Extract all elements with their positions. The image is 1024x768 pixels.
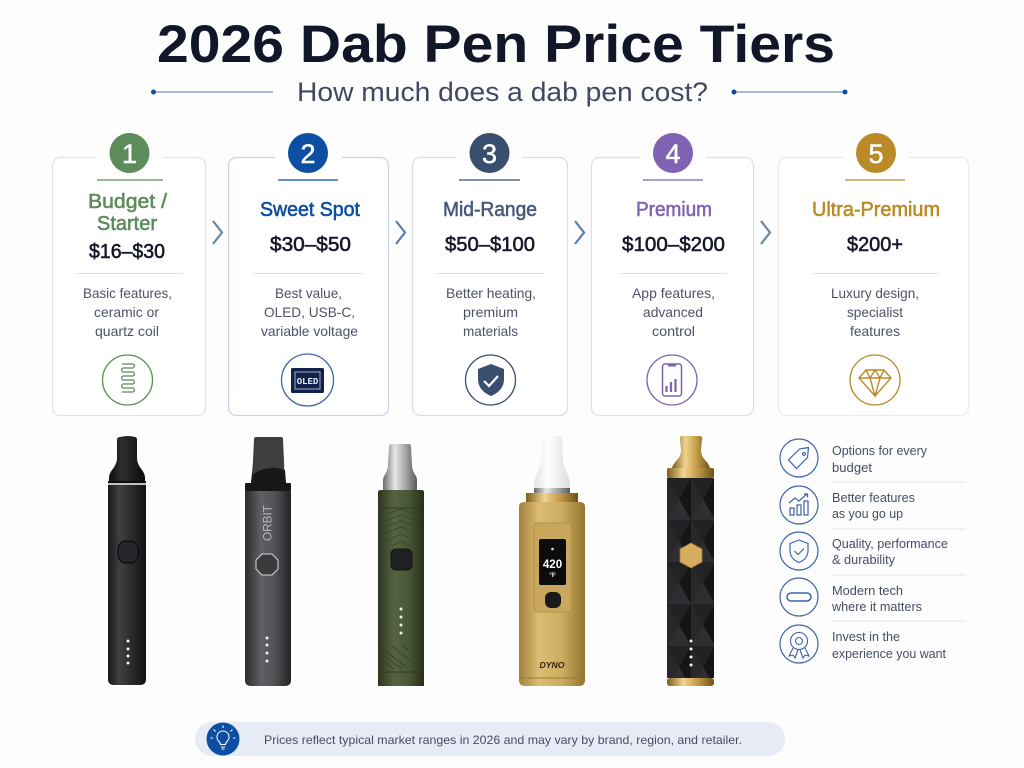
panel: tier 3 mid-range	[412, 133, 568, 416]
benefit: modern tech: where it matters	[831, 600, 922, 614]
description: OLED, USB-C,	[264, 304, 355, 320]
power button	[118, 541, 138, 563]
price: $200+	[847, 234, 903, 256]
number badge 3	[470, 133, 510, 173]
icon: light bulb	[206, 722, 240, 756]
icon: coil	[102, 355, 152, 405]
icon: OLED display: OLED	[297, 377, 319, 387]
icon: phone with bars	[647, 355, 697, 405]
footer note: Prices reflect typical market ranges in 2026 and may vary by brand, region, and retailer.	[264, 733, 742, 747]
tier name: Mid-Range	[443, 199, 537, 221]
panel: tier 4 premium	[592, 133, 754, 416]
number badge 4	[653, 133, 693, 173]
benefit: invest: Invest in the	[832, 630, 900, 644]
tier name: Starter	[97, 213, 157, 235]
number badge 2	[288, 133, 328, 173]
description	[632, 285, 715, 339]
arrow 3 to 4	[575, 221, 584, 244]
price: $30–$50	[270, 234, 351, 256]
number badge 3: 3	[482, 139, 497, 169]
title: 2026 Dab Pen Price Tiers	[157, 15, 835, 74]
pen 5: black and gold	[667, 436, 714, 686]
button	[545, 592, 561, 608]
temperature screen	[539, 539, 566, 585]
pen 1: matte black	[108, 436, 146, 685]
benefit: better features	[780, 486, 915, 524]
footer note	[195, 722, 785, 756]
description: specialist	[847, 304, 903, 320]
hexagon button	[680, 543, 702, 568]
octagon button	[256, 554, 278, 575]
description: advanced	[643, 304, 703, 320]
description: premium	[463, 304, 518, 320]
benefit: invest	[780, 625, 947, 663]
number badge 5	[856, 133, 896, 173]
arrow 2 to 3	[396, 221, 405, 244]
number badge 4: 4	[665, 139, 681, 169]
description: Best value,	[275, 285, 342, 301]
pen 4: gold dyno	[519, 436, 585, 686]
description: ceramic or	[94, 304, 159, 320]
benefit: options for every budget: Options for every	[832, 444, 928, 458]
button	[391, 549, 412, 570]
benefit: better features: Better features	[832, 491, 915, 505]
benefit: quality: Quality, performance	[832, 537, 948, 551]
brand label: DYNO	[540, 661, 565, 670]
description: quartz coil	[95, 323, 159, 339]
arrow 4 to 5	[761, 221, 770, 244]
number badge 1: 1	[122, 139, 137, 169]
benefit: better features: as you go up	[832, 507, 903, 521]
description: Luxury design,	[831, 285, 919, 301]
benefit: quality: & durability	[832, 553, 896, 567]
description: materials	[463, 323, 518, 339]
icon: diamond	[850, 355, 900, 405]
benefit: options for every budget	[780, 439, 928, 477]
icon: shield check	[466, 355, 516, 405]
description: variable voltage	[261, 323, 358, 339]
benefit: modern tech	[780, 578, 922, 616]
description: App features,	[632, 285, 715, 301]
tier name: Premium	[636, 199, 712, 221]
tier name: Ultra-Premium	[812, 199, 940, 221]
price: $100–$200	[622, 234, 725, 256]
tier name	[88, 191, 167, 235]
number badge 5: 5	[868, 139, 884, 169]
description: Basic features,	[83, 285, 172, 301]
panel: tier 2 sweet spot	[228, 133, 388, 416]
tier name: Budget /	[88, 191, 167, 213]
arrow 1 to 2	[213, 221, 222, 244]
number badge 2: 2	[300, 139, 316, 169]
subtitle with rules: How much does a dab pen cost?	[297, 77, 708, 107]
description: control	[652, 323, 695, 339]
description: features	[850, 323, 900, 339]
price: $16–$30	[89, 241, 165, 263]
tier name: Sweet Spot	[260, 199, 360, 221]
pen 2: gray orbit	[245, 437, 291, 686]
subtitle with rules	[151, 77, 848, 107]
description	[831, 285, 919, 339]
description: Better heating,	[446, 285, 536, 301]
description	[446, 285, 536, 339]
description	[261, 285, 358, 339]
benefit list	[780, 439, 966, 663]
panel: tier 1 budget	[52, 133, 206, 416]
brand label: ORBIT	[262, 505, 274, 541]
temperature screen: 420	[543, 559, 562, 571]
pen 3: green textured	[378, 444, 424, 686]
icon: OLED display	[282, 354, 334, 406]
benefit: invest: experience you want	[832, 647, 947, 661]
panel: tier 5 ultra-premium	[778, 133, 968, 416]
benefit: quality	[780, 532, 948, 570]
description	[83, 285, 172, 339]
price: $50–$100	[445, 234, 535, 256]
temperature screen: °F	[549, 571, 556, 579]
benefit: modern tech: Modern tech	[832, 584, 903, 598]
benefit: options for every budget: budget	[832, 461, 873, 475]
number badge 1	[110, 133, 150, 173]
